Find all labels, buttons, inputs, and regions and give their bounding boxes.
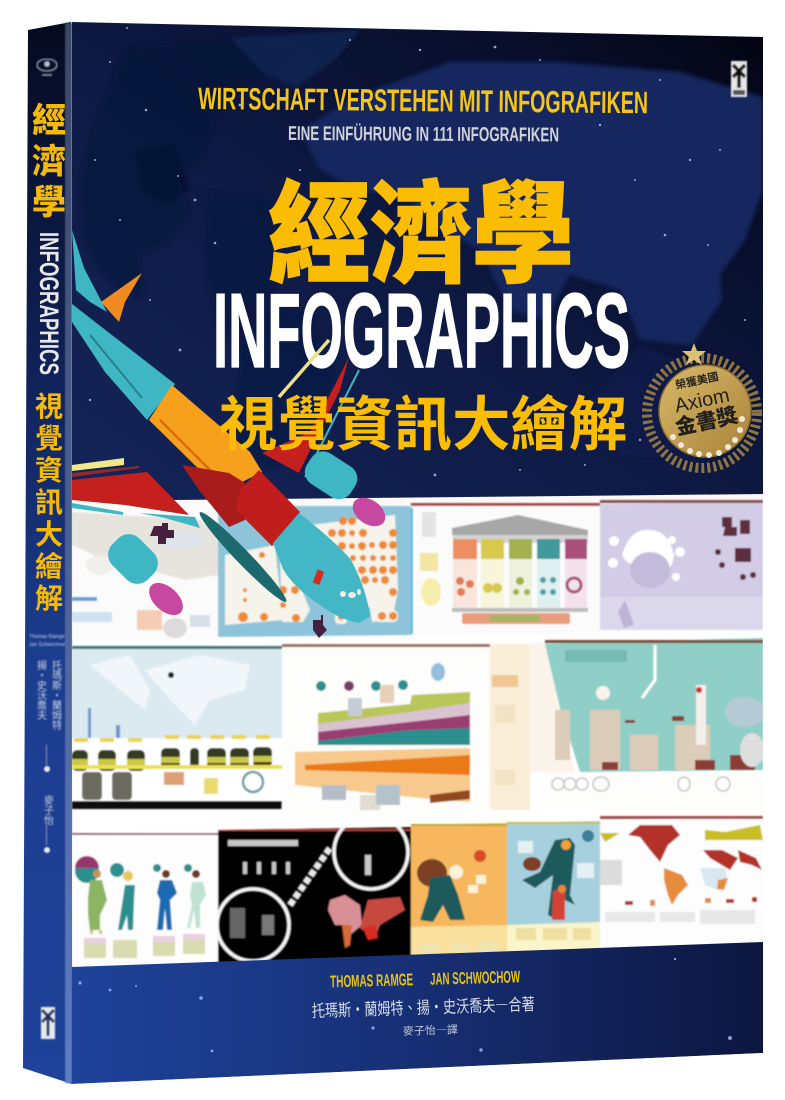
airplane illustration xyxy=(72,230,391,638)
spine logo: publisher mark xyxy=(41,1007,55,1039)
spine authors: Jan Schwochow xyxy=(29,642,65,648)
translator: 麥子怡—譯 xyxy=(403,1021,458,1039)
spine subtitle chinese: 視 xyxy=(35,385,63,425)
stabilizer orange xyxy=(101,273,142,322)
spine subtitle INFOGRAPHICS: INFOGRAPHICS xyxy=(34,232,64,375)
seal text xyxy=(665,366,740,442)
award seal xyxy=(647,343,757,468)
panel: teal GDP infographic xyxy=(530,637,763,792)
spine authors: 托瑪斯・蘭姆特 xyxy=(50,659,62,731)
authors latin: JAN SCHWOCHOW xyxy=(430,967,521,989)
authors chinese: 托瑪斯・蘭姆特、揚・史沃喬夫—合著 xyxy=(311,990,535,1022)
panel: blue illustration xyxy=(507,821,600,955)
upper wing xyxy=(262,357,349,473)
secondary title chinese: 視覺資訊大繪解 xyxy=(219,377,627,462)
white strip above panels xyxy=(72,494,763,503)
left engine xyxy=(102,528,164,590)
figure overalls xyxy=(118,885,135,930)
spine title: 學 xyxy=(32,175,66,224)
seal text: 榮獲美國 xyxy=(674,368,720,393)
spine title: 經 xyxy=(32,93,66,142)
spine subtitle chinese: 覺 xyxy=(35,417,63,457)
figure blue xyxy=(157,880,177,930)
spine xyxy=(23,22,72,1084)
panel row 2 xyxy=(72,638,765,820)
spine subtitle chinese: 解 xyxy=(35,577,63,617)
world map silhouettes xyxy=(80,30,763,470)
lower stars xyxy=(78,958,732,1052)
panel row 1 xyxy=(72,500,763,640)
seal pearls xyxy=(670,416,745,458)
seal star xyxy=(682,343,706,365)
spine authors xyxy=(29,634,65,853)
stars xyxy=(89,27,746,476)
panel: red world map xyxy=(599,815,763,924)
panel: layered area chart xyxy=(282,643,490,820)
red cylinder xyxy=(236,470,300,546)
panel: black chain map xyxy=(217,815,411,963)
spine title: 濟 xyxy=(32,134,66,183)
wing lines xyxy=(279,340,329,397)
seal text: 金書獎 xyxy=(672,399,740,442)
bottom navy band xyxy=(72,942,763,1084)
panel row 3 xyxy=(72,815,763,968)
panel: temple chart xyxy=(411,503,600,635)
rear fuselage xyxy=(72,304,175,420)
cyan accents xyxy=(72,503,123,515)
spine authors: 麥子怡 xyxy=(42,794,54,826)
sub heading: german subtitle: EINE EINFÜHRUNG IN 111 INFOGRAFIKEN xyxy=(288,122,559,146)
starry background xyxy=(70,20,770,500)
spine subtitle chinese: 資 xyxy=(35,449,63,489)
panel: world map white xyxy=(72,504,218,640)
underside wing xyxy=(195,508,291,606)
upper engine xyxy=(304,451,358,500)
panel: cream column xyxy=(490,644,530,810)
upper pink cone xyxy=(347,492,391,532)
panel: blue dots map xyxy=(218,506,411,637)
spine subtitle chinese: 繪 xyxy=(35,545,63,585)
engine strut xyxy=(305,370,359,477)
orange section xyxy=(149,385,262,492)
spine subtitle chinese: 訊 xyxy=(35,481,63,521)
main title chinese: 經濟學 xyxy=(268,145,574,305)
panel: lavender portrait xyxy=(600,500,763,630)
seal text: Axiom xyxy=(673,384,732,417)
panel: workers figures xyxy=(72,831,218,968)
red flange xyxy=(182,465,245,527)
spine logo: publisher emblem xyxy=(37,59,57,76)
lower pink cone xyxy=(143,577,189,621)
rear wing red xyxy=(72,472,189,515)
yellow stripe xyxy=(72,458,124,471)
figure green xyxy=(88,880,107,930)
figure white xyxy=(187,882,206,928)
nose xyxy=(273,513,370,623)
spine subtitle chinese: 大 xyxy=(35,513,63,553)
panel: orange illustration xyxy=(411,823,507,957)
spine authors: 揚・史沃喬夫 xyxy=(34,659,46,721)
publisher logo top right xyxy=(731,61,747,97)
spine authors: Thomas Ramge xyxy=(29,634,65,640)
dark landing gear xyxy=(150,523,174,544)
panel: map with truck icons xyxy=(72,645,282,809)
tail fin xyxy=(72,230,107,312)
authors latin: THOMAS RAMGE xyxy=(330,970,413,991)
